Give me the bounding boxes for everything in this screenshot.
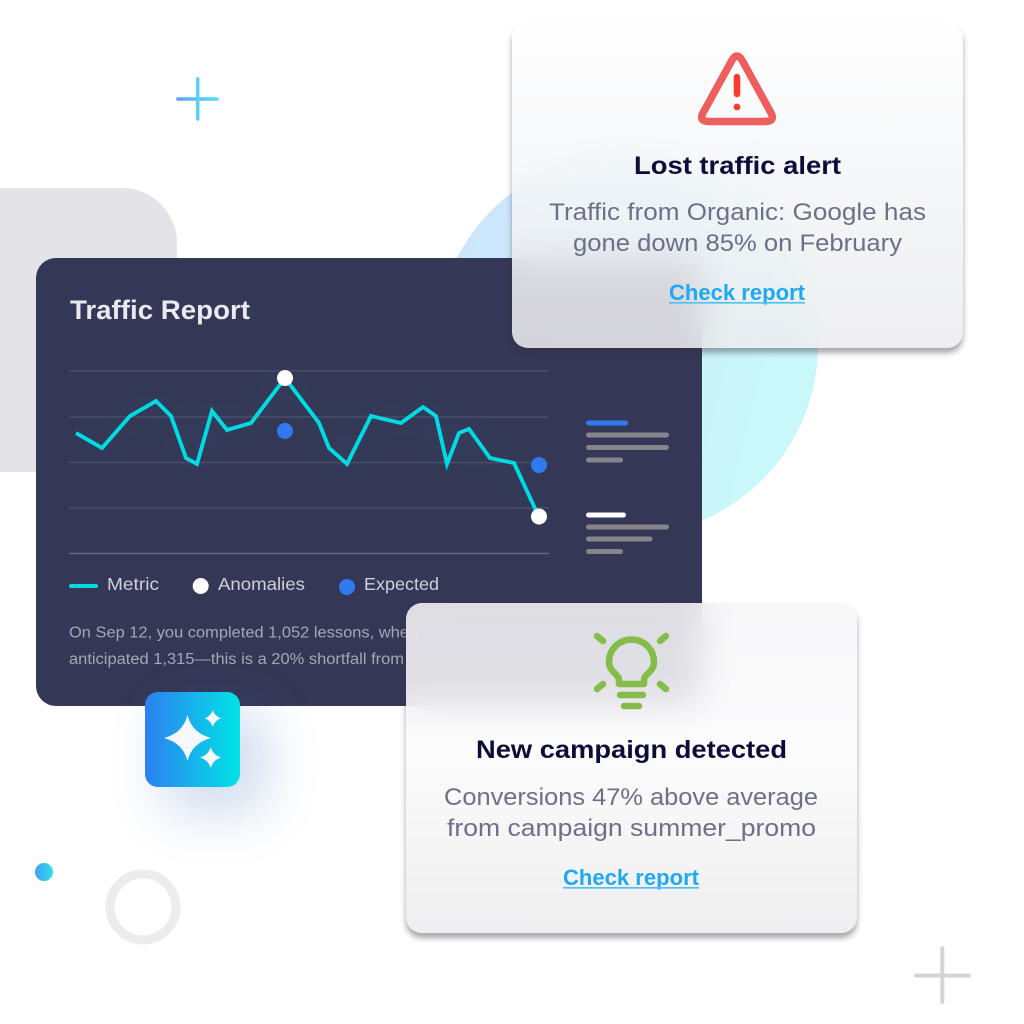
report note: anticipated 1,315—this is a 20% shortfall from [69, 651, 404, 668]
alert description: Traffic from Organic: Google has [549, 199, 926, 226]
expected points [277, 423, 547, 473]
background circle [436, 154, 818, 536]
decorative dot [35, 863, 53, 881]
link: check report: Check report [563, 865, 700, 890]
report note: On Sep 12, you completed 1,052 lessons, when [69, 624, 418, 642]
icon: warning triangle [702, 56, 772, 122]
panel background [36, 258, 702, 706]
metric line [76, 378, 539, 517]
decorative ring [110, 874, 176, 940]
icon: light bulb [597, 636, 666, 706]
line chart [69, 370, 549, 554]
decorative plus: blue [178, 79, 217, 119]
background grey rounded block [0, 188, 177, 472]
heading: lost traffic alert: Lost traffic alert [634, 152, 842, 180]
chart legend [69, 574, 439, 595]
panel: traffic report [36, 258, 702, 706]
alert description: gone down 85% on February [573, 230, 902, 257]
chart legend: Anomalies [218, 574, 305, 594]
chart legend: Metric [107, 574, 159, 594]
icon: sparkles [145, 692, 240, 787]
alert description [549, 199, 926, 257]
campaign description: Conversions 47% above average [444, 784, 818, 811]
panel: new campaign card [406, 603, 857, 933]
campaign description [444, 784, 818, 842]
heading: traffic report: Traffic Report [70, 295, 250, 325]
campaign description: from campaign summer_promo [447, 815, 816, 842]
panel: lost traffic alert card [512, 22, 963, 348]
decorative plus: grey [916, 948, 969, 1002]
report note [69, 624, 418, 668]
chart legend: Expected [364, 574, 439, 594]
side summary: anomalies [586, 512, 669, 554]
side summary: expected [586, 420, 669, 462]
heading: new campaign detected: New campaign detected [476, 736, 787, 764]
link: check report: Check report [669, 280, 806, 305]
anomaly points [277, 370, 547, 524]
